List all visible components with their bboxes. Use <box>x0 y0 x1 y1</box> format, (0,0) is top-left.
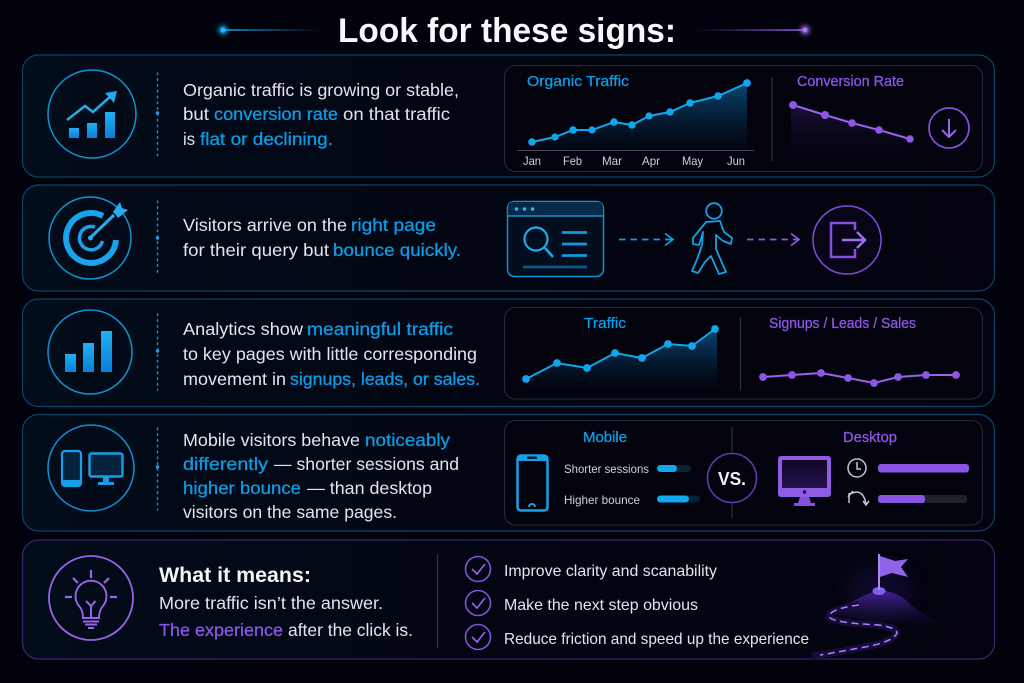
chart: organic traffic: Mar <box>602 154 622 168</box>
panel: bounce sign <box>22 185 994 291</box>
text block: but <box>183 104 209 124</box>
text block: bounce quickly. <box>333 240 461 260</box>
text block: what it means: after the click is. <box>288 620 413 640</box>
chart: organic traffic: Organic Traffic <box>527 74 629 90</box>
mobile column: Mobile <box>583 430 627 446</box>
text block: — than desktop <box>307 478 432 498</box>
checklist: Improve clarity and scanability <box>504 563 717 580</box>
desktop column: Desktop <box>843 430 897 446</box>
icon: exit door <box>813 206 881 274</box>
text block: for their query but <box>183 240 329 260</box>
text block: right page <box>351 215 436 235</box>
dotted separator <box>156 314 159 390</box>
text block: Mobile visitors behave <box>183 430 360 450</box>
mobile column: Shorter sessions <box>564 462 649 476</box>
dotted separator <box>156 201 159 275</box>
card: mobile vs desktop comparison <box>504 420 982 525</box>
icon: check 1 <box>466 556 490 582</box>
text block: Analytics show <box>183 319 303 339</box>
text block: signups, leads, or sales. <box>290 369 480 389</box>
dotted separator <box>156 73 159 157</box>
text block: flat or declining. <box>200 129 333 149</box>
vs badge: VS. <box>718 469 746 489</box>
text block: — shorter sessions and <box>274 454 459 474</box>
text block: noticeably <box>365 430 450 450</box>
vs badge <box>708 454 756 502</box>
text block <box>183 319 480 389</box>
icon: clock <box>848 459 866 477</box>
chart: organic traffic: Feb <box>563 154 582 168</box>
text block: what it means <box>159 564 413 640</box>
chart: conversion rate <box>789 74 914 160</box>
checklist <box>466 556 809 650</box>
panel: what it means <box>22 540 994 659</box>
chart: traffic: Traffic <box>584 316 626 332</box>
chart: signups leads sales: Signups / Leads / Sales <box>769 316 916 332</box>
icon: monitor <box>778 456 831 506</box>
mobile column <box>517 430 700 510</box>
text block <box>183 430 459 522</box>
text block: what it means: More traffic isn’t the answer. <box>159 593 383 613</box>
icon: bar chart <box>48 310 132 394</box>
panel: analytics sign <box>22 299 994 406</box>
decorative line right <box>695 26 810 34</box>
panel: mobile vs desktop sign <box>22 414 994 531</box>
chart: organic traffic <box>517 74 754 168</box>
mobile column: Higher bounce <box>564 493 640 507</box>
arrow: to exit <box>747 234 799 246</box>
text block: what it means: What it means: <box>159 564 311 587</box>
icon: browser search window <box>508 202 604 276</box>
chart: organic traffic: Jun <box>727 154 745 168</box>
chart: organic traffic: Apr <box>642 154 660 168</box>
chart: signups leads sales <box>759 316 960 387</box>
text block: conversion rate <box>214 104 338 124</box>
desktop column <box>778 430 969 506</box>
checklist: Reduce friction and speed up the experience <box>504 631 809 648</box>
text block: meaningful traffic <box>307 319 453 339</box>
checklist: Make the next step obvious <box>504 597 698 614</box>
arrow: to visitor <box>619 234 673 246</box>
icon: target <box>49 197 131 279</box>
card: traffic vs conversion charts <box>504 66 982 172</box>
icon: check 3 <box>466 624 490 650</box>
card: traffic vs signups charts <box>504 308 982 399</box>
illustration: flag on mountain with path <box>812 554 945 656</box>
icon: down arrow <box>929 108 969 148</box>
chart: organic traffic: Jan <box>523 154 541 168</box>
icon: phone <box>517 455 548 510</box>
chart: organic traffic: May <box>682 154 703 168</box>
decorative line left <box>218 26 321 34</box>
panel: organic traffic sign <box>22 55 994 177</box>
icon: walking person <box>692 203 732 274</box>
icon: light bulb <box>49 556 133 640</box>
text block: to key pages with little corresponding <box>183 344 477 364</box>
text block <box>183 80 459 149</box>
chart: traffic <box>522 316 719 388</box>
text block: what it means: The experience <box>159 620 283 640</box>
text block: Visitors arrive on the <box>183 215 347 235</box>
text block: on that traffic <box>343 104 450 124</box>
icon: growth chart <box>48 70 136 158</box>
text block: Organic traffic is growing or stable, <box>183 80 459 100</box>
icon: bounce arrow <box>848 491 869 505</box>
icon: phone and monitor <box>48 425 134 511</box>
text block: movement in <box>183 369 286 389</box>
text block: is <box>183 129 195 149</box>
chart: conversion rate: Conversion Rate <box>797 74 904 90</box>
text block: visitors on the same pages. <box>183 502 397 522</box>
icon: check 2 <box>466 590 490 616</box>
heading text: Look for these signs: <box>338 12 676 50</box>
dotted separator <box>156 428 159 510</box>
text block: differently <box>183 454 268 474</box>
text block: higher bounce <box>183 478 301 498</box>
text block <box>183 215 461 260</box>
